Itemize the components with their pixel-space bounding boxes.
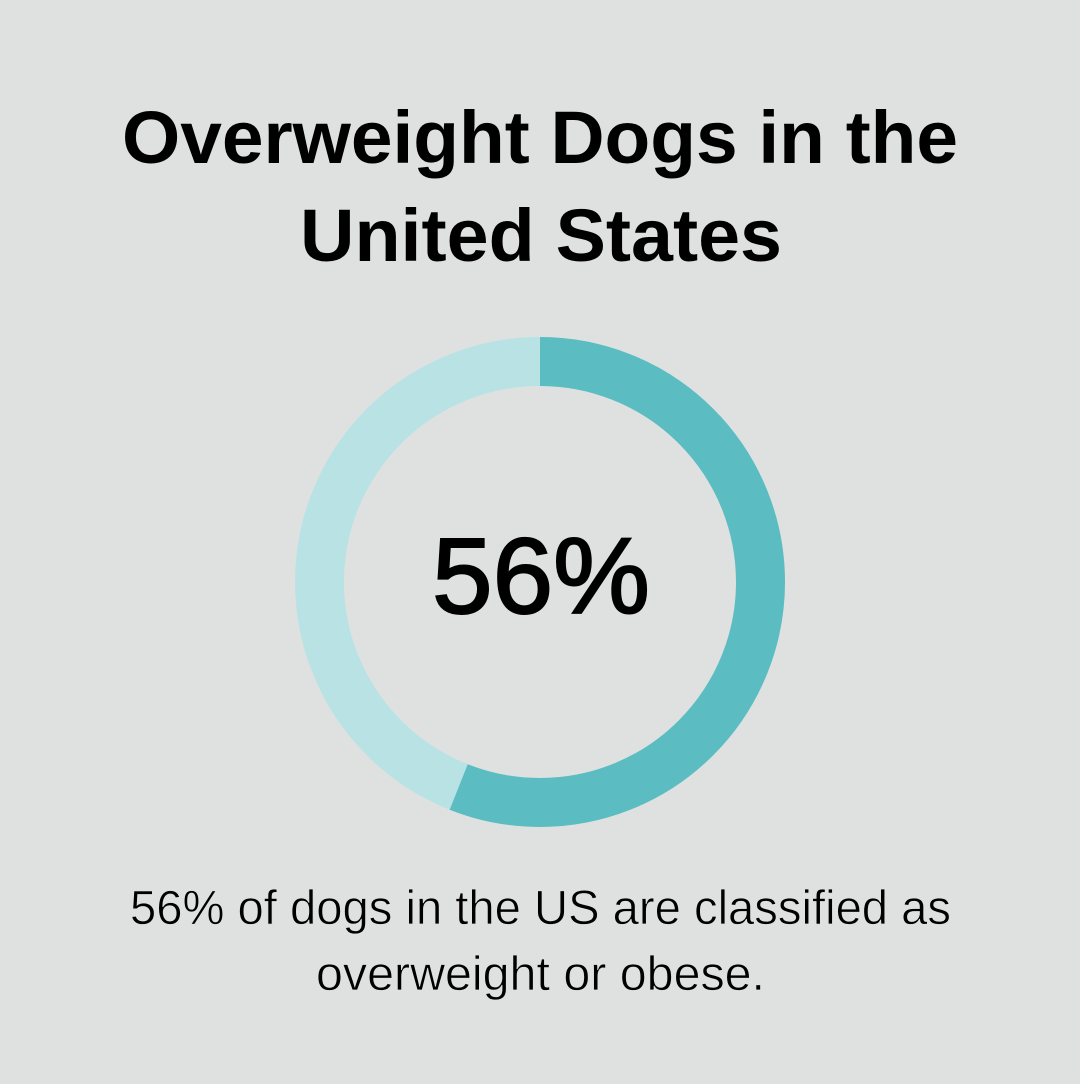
caption (130, 882, 951, 1001)
donut segment: 56% (320, 362, 760, 802)
title: United States (300, 194, 782, 277)
caption: 56% of dogs in the US are classified as (130, 882, 951, 935)
caption: overweight or obese. (316, 948, 765, 1001)
title (122, 96, 958, 277)
donut chart: 56% (320, 362, 760, 802)
title: Overweight Dogs in the (122, 96, 958, 179)
center value: 56% (432, 515, 650, 636)
donut track: remaining 44% (320, 362, 760, 802)
